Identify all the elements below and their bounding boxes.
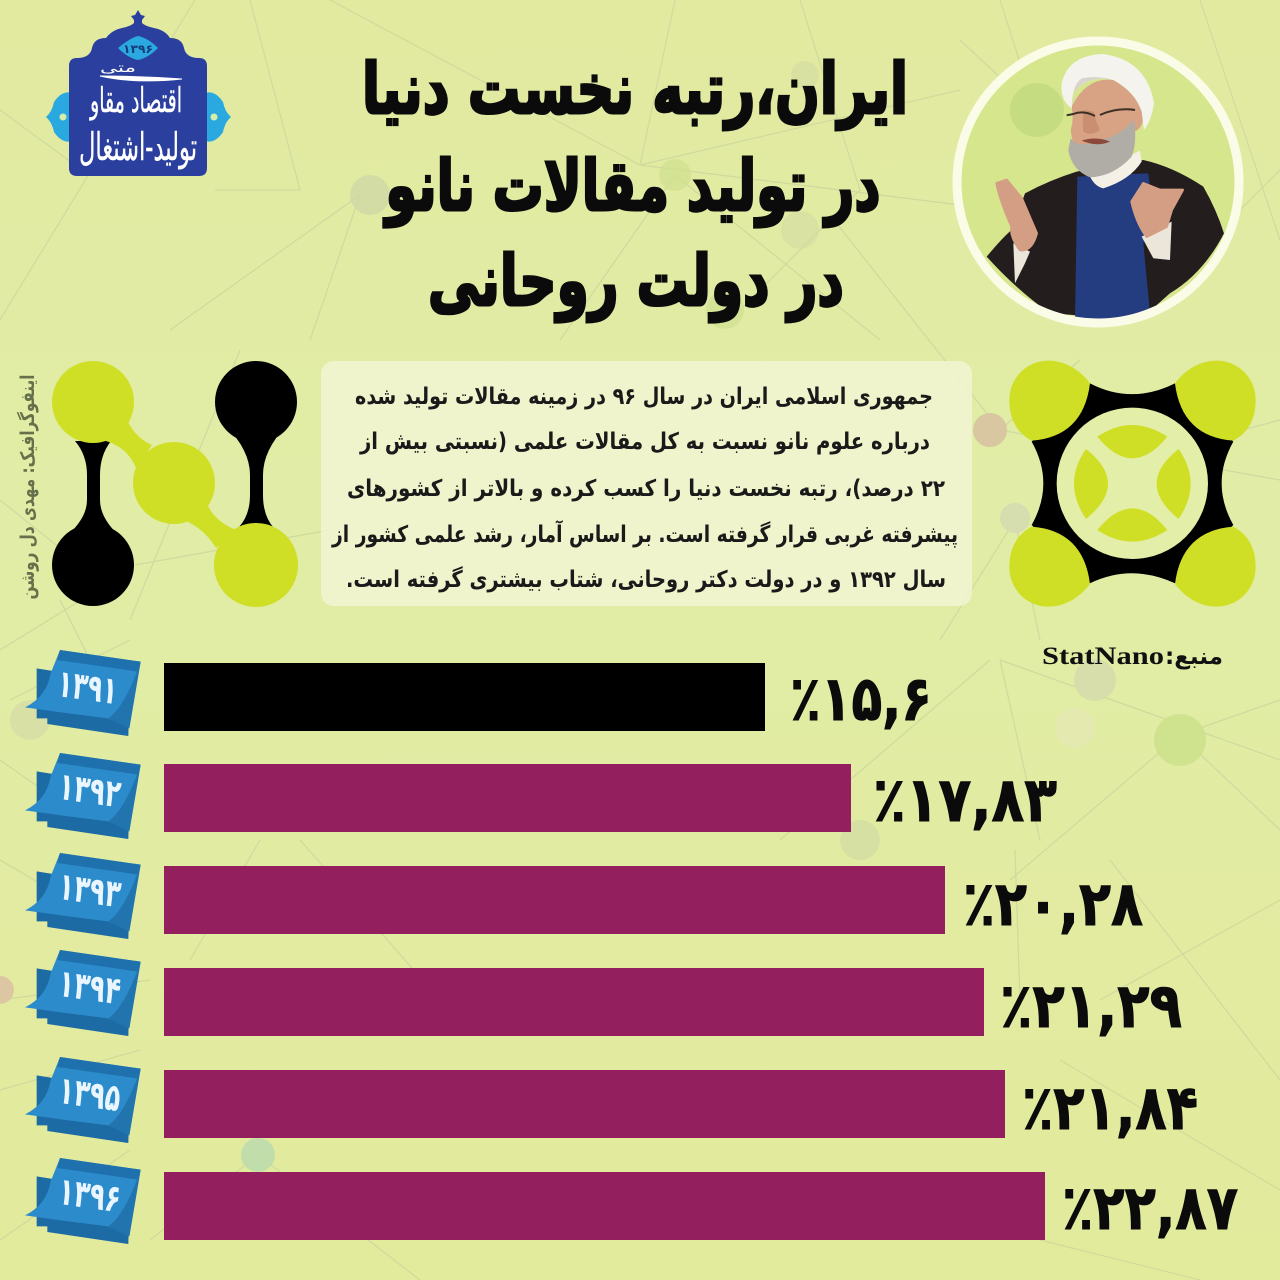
title: [362, 48, 908, 322]
source: [1042, 643, 1223, 670]
hands: [997, 180, 1037, 250]
icon: nano N logo: [52, 361, 298, 607]
bar 1395: [25, 1057, 1198, 1144]
title: ایران،رتبه نخست دنیا: [362, 48, 908, 130]
bar 1391: [25, 650, 932, 736]
bar chart: [25, 650, 1238, 1244]
bar 1395: ٪۲۱,۸۴: [1022, 1071, 1198, 1144]
bar 1392: ۱۳۹۲: [56, 764, 124, 816]
panel: intro text: پیشرفته غربی قرار گرفته است. بر اساس آمار، رشد علمی کشور از: [331, 519, 958, 548]
bar 1393: ۱۳۹۳: [56, 864, 124, 916]
credit: اینفوگرافیک: مهدی دل روشن: [16, 375, 39, 599]
bar 1395: ۱۳۹۵: [56, 1068, 124, 1120]
panel: intro text: جمهوری اسلامی ایران در سال ۹۶ در زمینه مقالات تولید شده: [355, 384, 933, 410]
bar 1392: ٪۱۷,۸۳: [873, 763, 1057, 836]
bar 1396: [25, 1158, 1238, 1244]
bar 1393: [25, 853, 1143, 940]
bar 1391: ٪۱۵,۶: [790, 662, 932, 735]
panel: intro text: درباره علوم نانو نسبت به کل مقالات علمی (نسبتی بیش از: [359, 429, 930, 455]
shirt: [1075, 173, 1153, 320]
panel: intro text: ۲۲ درصد)، رتبه نخست دنیا را کسب کرده و بالاتر از کشورهای: [347, 476, 945, 502]
logo: economy badge: متی: [100, 61, 136, 76]
face: [1070, 80, 1143, 144]
glasses: [1067, 109, 1135, 116]
beard: [1068, 119, 1135, 177]
bar 1394: [25, 950, 1182, 1042]
icon: nano ring logo: [1009, 361, 1256, 607]
source: StatNano: [1042, 643, 1164, 670]
portrait: [957, 41, 1239, 323]
bar 1396: ٪۲۲,۸۷: [1062, 1171, 1238, 1244]
panel: intro text: سال ۱۳۹۲ و در دولت دکتر روحانی، شتاب بیشتری گرفته است.: [346, 566, 946, 593]
logo: economy badge: تولید-اشتغال: [79, 125, 197, 170]
bar 1392: [25, 753, 1057, 839]
sleeves: [1013, 243, 1030, 283]
logo: economy badge: [46, 10, 231, 176]
bar 1393: ٪۲۰,۲۸: [963, 867, 1143, 940]
bar 1391: ۱۳۹۱: [55, 661, 121, 713]
title: در تولید مقالات نانو: [383, 145, 880, 227]
bar 1394: ٪۲۱,۲۹: [1000, 969, 1182, 1042]
logo: economy badge: ۱۳۹۶: [123, 42, 153, 56]
robe: [987, 160, 1224, 320]
bar 1396: ۱۳۹۶: [56, 1169, 124, 1221]
title: در دولت روحانی: [428, 240, 844, 322]
turban: [1061, 54, 1154, 130]
collar: [1090, 151, 1142, 188]
logo: economy badge: اقتصاد مقاو: [89, 81, 182, 121]
panel: intro text: [321, 361, 972, 606]
source: منبع:: [1165, 644, 1223, 670]
bar 1394: ۱۳۹۴: [56, 961, 124, 1013]
